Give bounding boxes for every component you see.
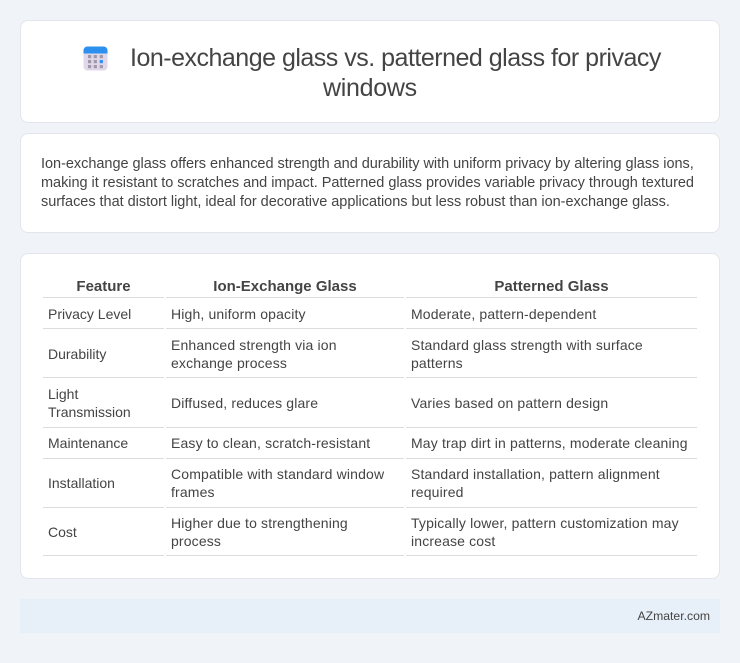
row: privacy level — [48, 306, 596, 322]
row: cost: Cost — [48, 524, 77, 540]
footer bar — [20, 599, 720, 633]
row: installation: Installation — [48, 475, 115, 491]
row: light transmission: Light — [48, 386, 78, 402]
row: light transmission: Diffused, reduces glare — [171, 395, 318, 411]
table header: Patterned Glass — [494, 278, 609, 295]
row: light transmission: Transmission — [48, 404, 131, 420]
row: durability: patterns — [411, 355, 463, 371]
panel: summary card — [20, 133, 720, 233]
row: maintenance: May trap dirt in patterns, moderate cleaning — [411, 435, 688, 451]
row: cost: increase cost — [411, 533, 495, 549]
row: installation: frames — [171, 484, 215, 500]
row: light transmission — [48, 386, 608, 420]
row: cost: Higher due to strengthening — [171, 515, 348, 531]
comparison table — [43, 278, 697, 556]
row: cost: Typically lower, pattern customization may — [411, 515, 679, 531]
row: privacy level: Moderate, pattern-dependent — [411, 306, 596, 322]
table header: Feature — [76, 278, 131, 295]
row: maintenance — [48, 435, 688, 451]
text block: summary — [41, 156, 694, 210]
row: cost — [48, 515, 679, 549]
row: privacy level: Privacy Level — [48, 306, 131, 322]
heading: title — [130, 44, 662, 102]
text block: summary: making it resistant to scratches and impact. Patterned glass provides variable privacy through textured — [41, 175, 694, 191]
heading: title: Ion-exchange glass vs. patterned glass for privacy — [130, 44, 661, 72]
row: durability: exchange process — [171, 355, 287, 371]
heading: title: windows — [323, 74, 417, 102]
row: installation: Compatible with standard window — [171, 466, 384, 482]
text block: summary: surfaces that distort light, ideal for decorative applications but less robust than ion-exchange glass. — [41, 194, 670, 210]
row: maintenance: Easy to clean, scratch-resistant — [171, 435, 370, 451]
row: maintenance: Maintenance — [48, 435, 128, 451]
row: installation: required — [411, 484, 464, 500]
row: durability: Standard glass strength with surface — [411, 337, 643, 353]
row: durability: Enhanced strength via ion — [171, 337, 337, 353]
table header — [76, 278, 609, 295]
row: durability: Durability — [48, 346, 106, 362]
panel: comparison table card — [20, 253, 720, 579]
row: cost: process — [171, 533, 221, 549]
row: durability — [48, 337, 643, 371]
footer text: source: AZmater.com — [638, 609, 710, 623]
row: installation: Standard installation, pattern alignment — [411, 466, 660, 482]
icon: calendar — [84, 46, 108, 70]
row: light transmission: Varies based on pattern design — [411, 395, 608, 411]
row: privacy level: High, uniform opacity — [171, 306, 306, 322]
panel: title card — [20, 20, 720, 123]
text block: summary: Ion-exchange glass offers enhanced strength and durability with uniform privacy by altering glass ions, — [41, 156, 694, 172]
table header: Ion-Exchange Glass — [213, 278, 357, 295]
row: installation — [48, 466, 660, 500]
